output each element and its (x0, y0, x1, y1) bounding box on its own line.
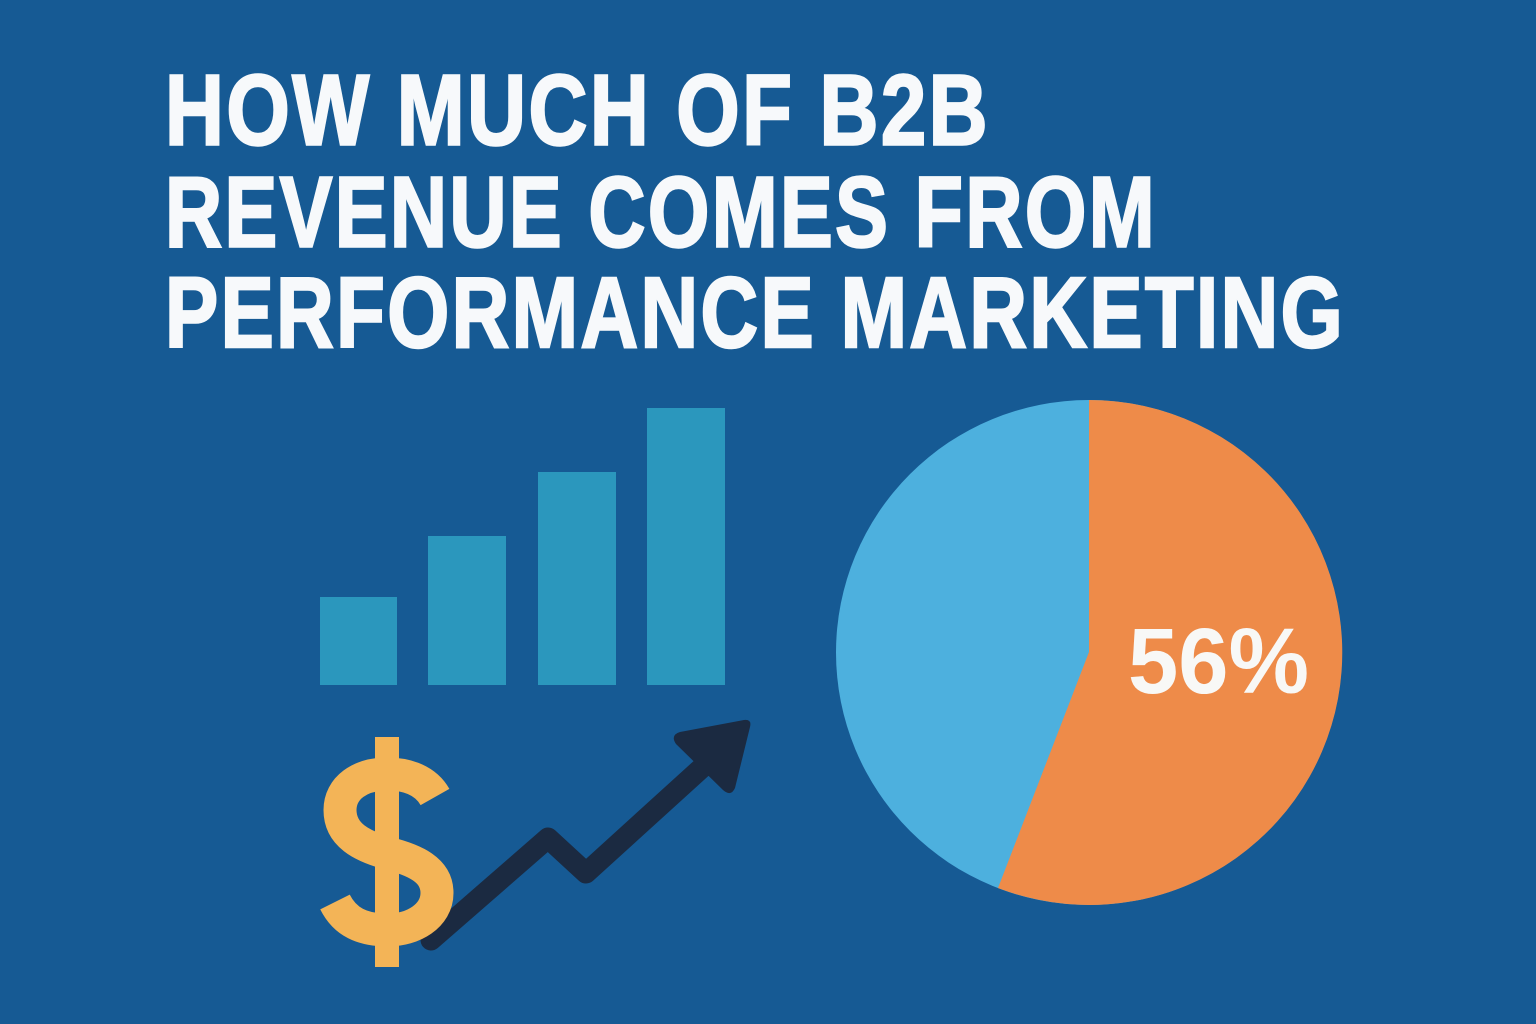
bar chart (320, 408, 725, 685)
title: HOW MUCH OF B2B (165, 54, 990, 166)
pie chart (836, 400, 1342, 905)
arrow (431, 720, 750, 940)
title (165, 54, 1345, 369)
pie label: 56% (1128, 609, 1309, 713)
icon: dollar sign (335, 737, 437, 967)
title: REVENUE COMES FROM (165, 156, 1157, 268)
